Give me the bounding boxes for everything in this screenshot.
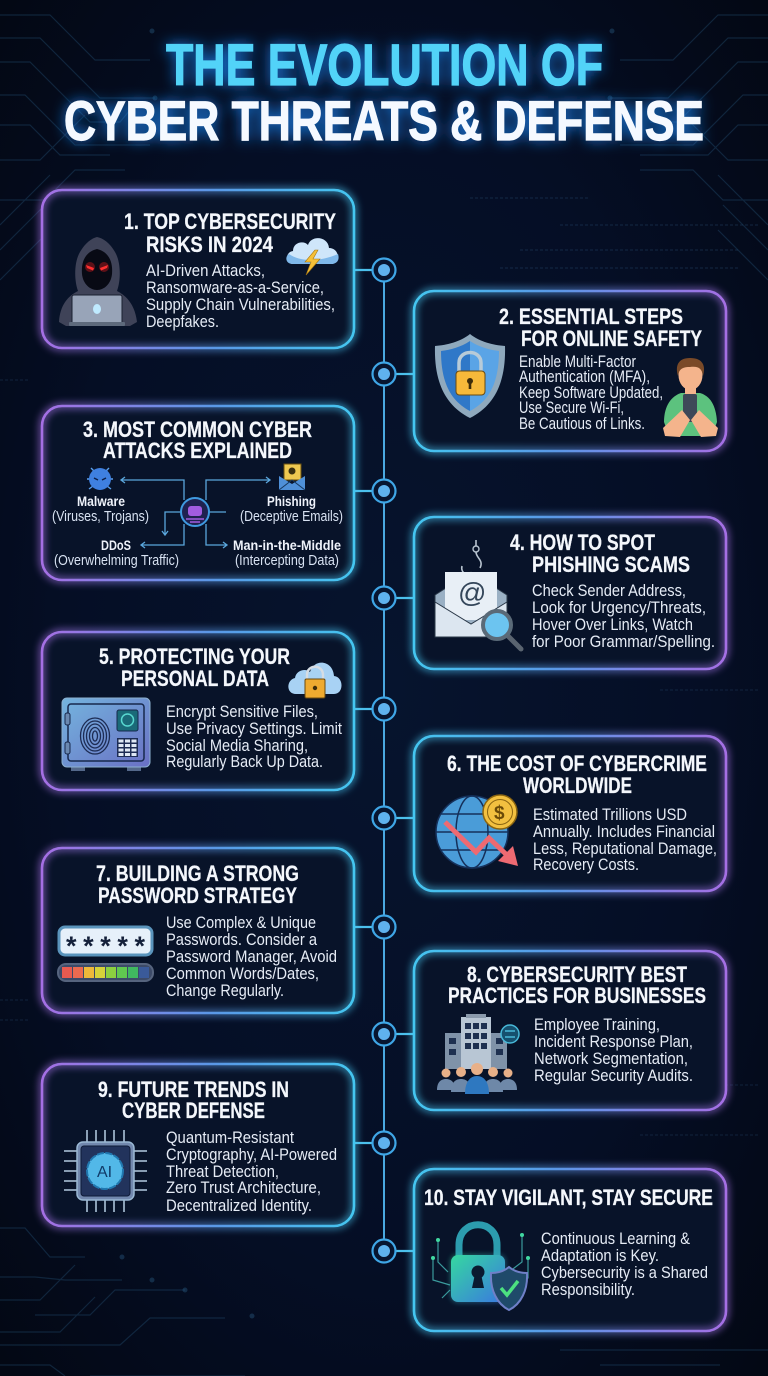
body text 1: Supply Chain Vulnerabilities, xyxy=(146,295,335,314)
body text 1: Ransomware-as-a-Service, xyxy=(146,278,324,297)
body text 7: Common Words/Dates, xyxy=(166,964,319,983)
heading 4: 4. HOW TO SPOT xyxy=(510,530,655,555)
body text 1: AI-Driven Attacks, xyxy=(146,261,265,280)
panel 8: business best practices xyxy=(414,951,726,1110)
heading 4 xyxy=(510,530,690,577)
icon: hooded hacker with laptop xyxy=(59,237,137,326)
icon: person with phone xyxy=(663,358,718,437)
body text 4: Look for Urgency/Threats, xyxy=(532,598,706,617)
heading 2 xyxy=(499,304,702,351)
heading 7: PASSWORD STRATEGY xyxy=(98,883,297,908)
body text 1: Deepfakes. xyxy=(146,312,219,331)
heading 1: 1. TOP CYBERSECURITY xyxy=(124,209,336,234)
heading 8 xyxy=(448,962,706,1008)
body text 1 xyxy=(146,261,335,331)
panel 1: top cybersecurity risks xyxy=(42,190,354,348)
icon: AI chip xyxy=(64,1130,147,1212)
heading 7 xyxy=(96,861,299,908)
icon: envelope, hook and magnifier: @ xyxy=(458,577,486,608)
panel 4: phishing scams xyxy=(414,517,726,669)
body text 9: Quantum-Resistant xyxy=(166,1128,294,1147)
body text 9: Zero Trust Architecture, xyxy=(166,1178,321,1197)
body text 5: Encrypt Sensitive Files, xyxy=(166,702,318,721)
heading 9: 9. FUTURE TRENDS IN xyxy=(98,1077,289,1102)
heading 3 xyxy=(83,417,312,463)
heading 4: PHISHING SCAMS xyxy=(532,552,690,577)
icon: AI chip: AI xyxy=(97,1164,112,1181)
panel 5: personal data xyxy=(42,632,354,790)
body text 2: Enable Multi-Factor xyxy=(519,352,636,371)
timeline nodes xyxy=(372,258,396,1262)
body text 9: Decentralized Identity. xyxy=(166,1196,312,1215)
body text 8 xyxy=(534,1015,693,1085)
body text 2 xyxy=(519,352,663,433)
icon: central threat node xyxy=(181,498,209,526)
panel 10: stay vigilant xyxy=(414,1169,726,1331)
body text 8: Network Segmentation, xyxy=(534,1049,688,1068)
icon: malware bug xyxy=(87,468,113,490)
icon: glowing padlock with shield xyxy=(431,1225,530,1310)
heading 7: 7. BUILDING A STRONG xyxy=(96,861,299,886)
label: phishing: (Deceptive Emails) xyxy=(240,509,343,525)
icon: envelope, hook and magnifier xyxy=(435,540,521,649)
heading 8: PRACTICES FOR BUSINESSES xyxy=(448,983,706,1008)
heading 3: 3. MOST COMMON CYBER xyxy=(83,417,312,442)
icon: phishing envelope xyxy=(279,464,305,490)
body text 6: Recovery Costs. xyxy=(533,855,639,874)
heading 5 xyxy=(99,644,290,691)
heading 5: 5. PROTECTING YOUR xyxy=(99,644,290,669)
label: ddos: (Overwhelming Traffic) xyxy=(54,553,179,569)
body text 2: Authentication (MFA), xyxy=(519,367,650,386)
heading 2: FOR ONLINE SAFETY xyxy=(521,326,702,351)
body text 6: Annually. Includes Financial xyxy=(533,822,715,841)
heading 1 xyxy=(124,209,336,257)
body text 5: Social Media Sharing, xyxy=(166,736,308,755)
label: phishing: Phishing xyxy=(267,493,316,509)
body text 10: Cybersecurity is a Shared xyxy=(541,1263,708,1282)
title: THE EVOLUTION OF xyxy=(166,33,603,98)
panel 2: essential steps xyxy=(414,291,726,451)
heading 9: CYBER DEFENSE xyxy=(122,1098,265,1123)
body text 4: Check Sender Address, xyxy=(532,581,686,600)
heading 6 xyxy=(447,751,707,798)
body text 5: Use Privacy Settings. Limit xyxy=(166,719,342,738)
body text 7 xyxy=(166,913,337,1000)
label: malware: Malware xyxy=(77,493,125,509)
panel 7: password strategy xyxy=(42,848,354,1013)
panel 3: common attacks xyxy=(42,406,354,580)
icon: password field: ***** xyxy=(66,931,145,961)
body text 7: Password Manager, Avoid xyxy=(166,947,337,966)
attack flow arrows xyxy=(121,477,270,548)
body text 4: Hover Over Links, Watch xyxy=(532,615,693,634)
label: ddos: DDoS xyxy=(101,537,131,553)
body text 8: Employee Training, xyxy=(534,1015,660,1034)
body text 8: Regular Security Audits. xyxy=(534,1066,693,1085)
body text 2: Use Secure Wi-Fi, xyxy=(519,398,624,417)
icon: cloud with padlock xyxy=(288,663,342,698)
body text 7: Passwords. Consider a xyxy=(166,930,317,949)
heading 8: 8. CYBERSECURITY BEST xyxy=(467,962,687,987)
heading 6: 6. THE COST OF CYBERCRIME xyxy=(447,751,707,776)
body text 6: Less, Reputational Damage, xyxy=(533,839,717,858)
label: man-in-the-middle: Man-in-the-Middle xyxy=(233,537,341,553)
body text 7: Change Regularly. xyxy=(166,981,284,1000)
panel 6: cost of cybercrime xyxy=(414,736,726,891)
body text 5 xyxy=(166,702,342,771)
icon: globe, coin and falling arrow xyxy=(436,795,518,868)
icon: globe, coin and falling arrow: $ xyxy=(494,803,505,824)
heading 1: RISKS IN 2024 xyxy=(146,232,274,257)
timeline spine xyxy=(355,270,413,1251)
heading 5: PERSONAL DATA xyxy=(121,666,269,691)
panel 9: future trends xyxy=(42,1064,354,1226)
label: malware: (Viruses, Trojans) xyxy=(52,509,149,525)
icon: office building with team xyxy=(437,1014,519,1094)
body text 10: Continuous Learning & xyxy=(541,1229,691,1248)
heading 6: WORLDWIDE xyxy=(523,773,632,798)
body text 9 xyxy=(166,1128,337,1215)
label: malware xyxy=(52,493,149,525)
body text 9: Threat Detection, xyxy=(166,1162,279,1181)
body text 5: Regularly Back Up Data. xyxy=(166,752,323,771)
body text 10: Adaptation is Key. xyxy=(541,1246,659,1265)
title xyxy=(64,33,704,152)
icon: shield with padlock xyxy=(435,334,505,418)
body text 2: Keep Software Updated, xyxy=(519,383,663,402)
body text 8: Incident Response Plan, xyxy=(534,1032,693,1051)
icon: fingerprint safe xyxy=(62,698,150,771)
body text 10 xyxy=(541,1229,708,1299)
heading 2: 2. ESSENTIAL STEPS xyxy=(499,304,683,329)
label: phishing xyxy=(240,493,343,525)
icon: storm cloud xyxy=(286,238,339,275)
label: man-in-the-middle: (Intercepting Data) xyxy=(235,553,339,569)
body text 2: Be Cautious of Links. xyxy=(519,414,645,433)
icon: strength meter xyxy=(58,964,153,981)
body text 9: Cryptography, AI-Powered xyxy=(166,1145,337,1164)
label: man-in-the-middle xyxy=(233,537,341,569)
body text 10: Responsibility. xyxy=(541,1280,635,1299)
body text 6 xyxy=(533,805,717,874)
heading 3: ATTACKS EXPLAINED xyxy=(103,438,292,463)
body text 4: for Poor Grammar/Spelling. xyxy=(532,632,715,651)
label: ddos xyxy=(54,537,179,569)
body text 4 xyxy=(532,581,715,651)
title: THE EVOLUTION OF xyxy=(166,33,603,98)
heading 9 xyxy=(98,1077,289,1123)
body text 7: Use Complex & Unique xyxy=(166,913,316,932)
body text 6: Estimated Trillions USD xyxy=(533,805,687,824)
